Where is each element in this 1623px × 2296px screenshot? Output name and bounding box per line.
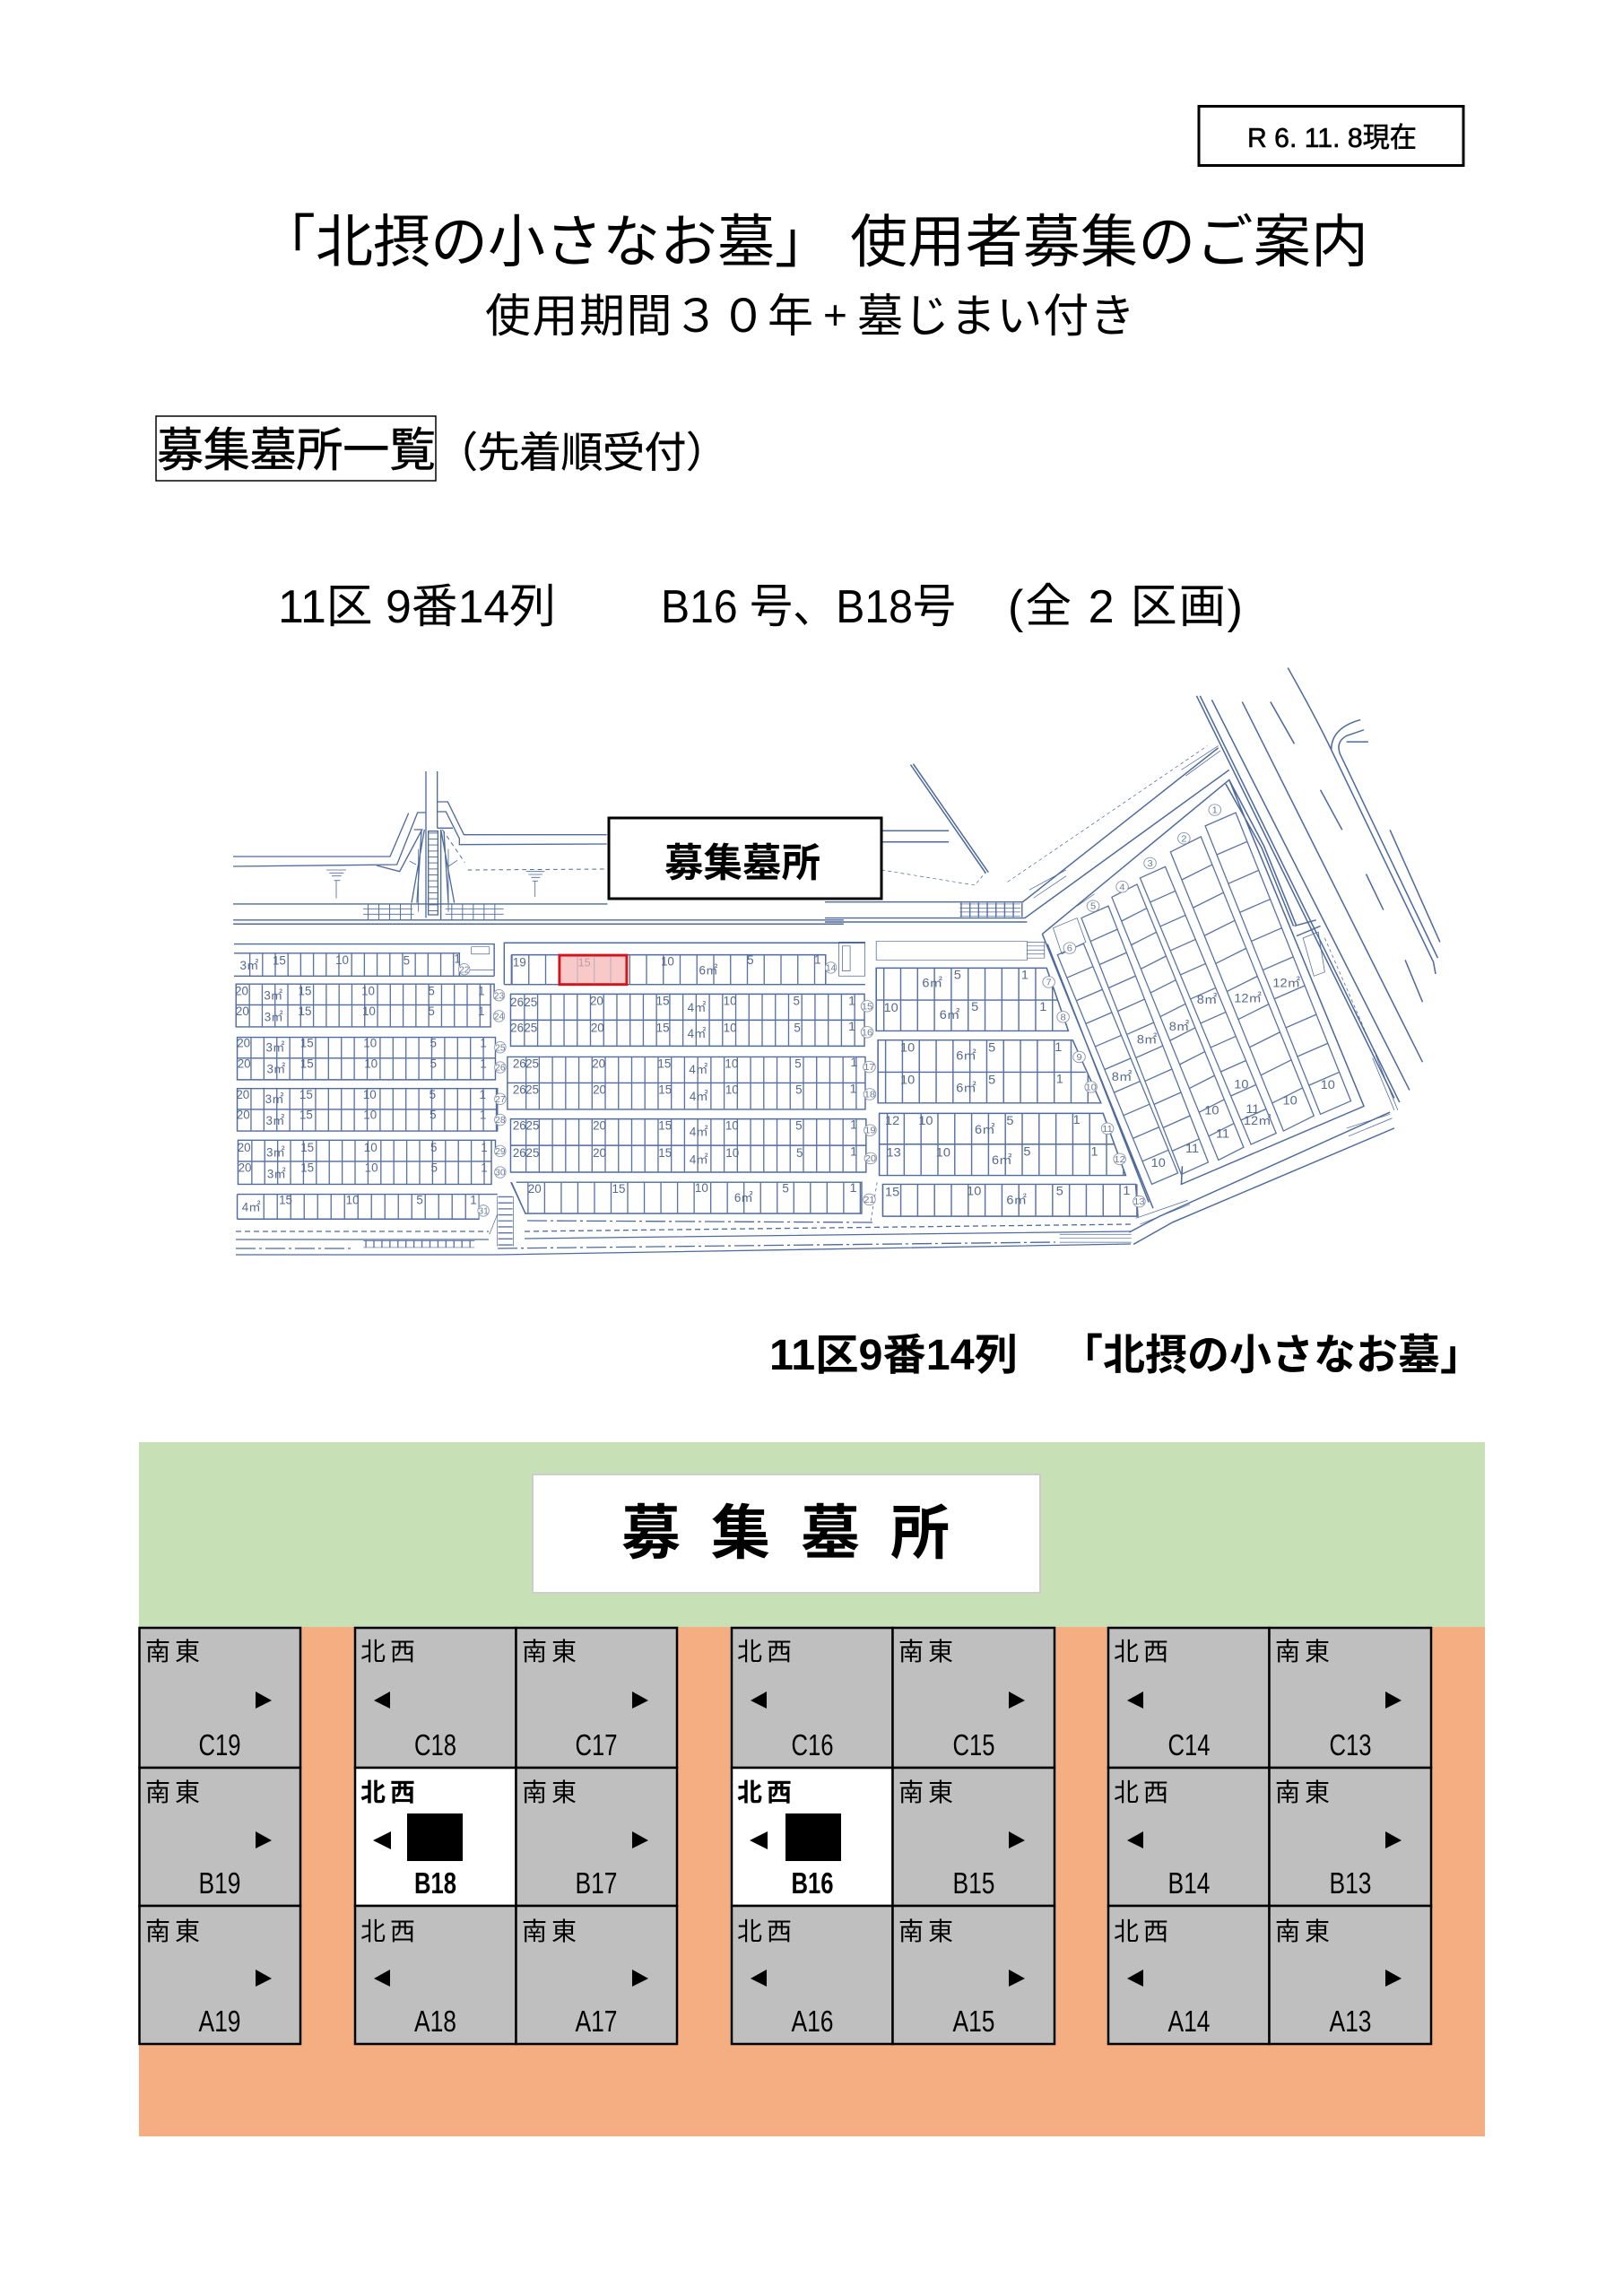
cell C13: [1270, 1628, 1431, 1768]
map: section number circles, right blocks: 11: [1102, 1124, 1113, 1135]
cell A14: [1108, 1906, 1270, 2044]
cell B15: 南東: [898, 1779, 958, 1806]
cell A18: A18: [414, 2005, 456, 2038]
cell C14: 北西: [1114, 1638, 1173, 1665]
cell B16 available: [732, 1768, 893, 1906]
map: section number circles, right blocks: 5: [1090, 901, 1096, 912]
map: section number circles, right blocks: 9: [1076, 1052, 1082, 1063]
map: section number circles, right blocks: 12: [1114, 1154, 1125, 1165]
cemetery map: [233, 668, 1440, 1255]
map: plot numbers, right blocks: 5: [988, 1073, 995, 1086]
map: plot numbers, right blocks: 13: [886, 1145, 901, 1159]
cell A17: 南東: [522, 1918, 581, 1945]
map: section number circles, left blocks: 29: [495, 1147, 506, 1157]
map: plot numbers, right blocks: 11: [1185, 1142, 1199, 1155]
map: plot numbers, right blocks: 10: [1283, 1093, 1298, 1107]
map: plot numbers, right blocks: 10: [900, 1040, 915, 1055]
cell B15: B15: [952, 1866, 995, 1900]
map: plot numbers, left blocks: 3㎡: [265, 1010, 283, 1023]
map: plot numbers, left blocks: 4㎡: [690, 1153, 708, 1167]
map: plot numbers, left blocks: 10: [365, 1161, 378, 1175]
map: plot numbers, right blocks: 6㎡: [922, 976, 942, 989]
map: right plot rows: [876, 968, 1138, 1216]
map: plot numbers, right blocks: 12㎡: [1244, 1113, 1271, 1127]
map: plot numbers, left blocks: 20: [235, 984, 248, 997]
map: plot numbers, left blocks: 15: [658, 1146, 672, 1160]
map: plot numbers, left blocks: 20: [238, 1141, 251, 1154]
date box: [1199, 106, 1463, 165]
plot layout background: green area: [139, 1442, 1485, 1627]
cell A17: [516, 1906, 677, 2044]
map: section number circles, right blocks: 4: [1119, 883, 1125, 892]
map: plot numbers, left blocks: 3㎡: [266, 1146, 285, 1160]
map: plot numbers, left blocks: 1: [478, 1004, 485, 1018]
map: plot numbers, right blocks: 12: [885, 1113, 899, 1127]
map: plot numbers, right blocks: 11: [1216, 1126, 1229, 1140]
map caption: 「北摂の小さなお墓」: [1061, 1331, 1482, 1378]
plot layout background: orange path area: [139, 1627, 1485, 2136]
map: plot numbers, left blocks: 15: [300, 1141, 314, 1154]
map: section number circles, right blocks: 7: [1046, 978, 1052, 987]
cell C14: C14: [1167, 1728, 1211, 1761]
map: section number circles, right blocks: 3: [1147, 858, 1153, 869]
map: plot numbers, left blocks: 25: [524, 996, 537, 1009]
cell A14: 北西: [1114, 1918, 1173, 1945]
map: plot numbers, left blocks: 25: [526, 1146, 539, 1160]
map: plot numbers, left blocks: 1: [454, 952, 461, 966]
cell A18: [355, 1906, 516, 2044]
cell B16 available: B16: [791, 1866, 834, 1900]
map: lower road lines: [236, 1221, 1131, 1255]
heading box: recruitment plots: 募集墓所: [621, 1500, 980, 1566]
map: section number circles, right blocks: 20: [865, 1153, 876, 1164]
map: plot numbers, left blocks: 25: [526, 1119, 539, 1133]
map: plot numbers, left blocks: 3㎡: [265, 1092, 284, 1106]
map: plot numbers, right blocks: 1: [1123, 1184, 1131, 1197]
cell C14: [1108, 1628, 1270, 1768]
map: plot numbers, left blocks: 20: [593, 1146, 606, 1160]
map: plot numbers, left blocks: 1: [481, 1141, 488, 1154]
cell C18: 北西: [360, 1638, 420, 1665]
map: plot numbers, left blocks: 15: [658, 1119, 672, 1133]
map: left and centre plot rows: [233, 904, 866, 1248]
cell C16: 北西: [737, 1638, 796, 1665]
map: plot numbers, right blocks: 1: [850, 1056, 858, 1069]
cell A18: 北西: [360, 1918, 420, 1945]
map: section number circles, right blocks: 15: [862, 1002, 872, 1012]
map: plot numbers, left blocks: 15: [299, 1109, 313, 1122]
map: plot numbers, left blocks: 5: [796, 1146, 803, 1160]
plot summary line: 11区 9番14列: [278, 581, 556, 633]
map: section number circles, right blocks: 21: [864, 1195, 875, 1205]
title: 「北摂の小さなお墓」: [258, 210, 832, 274]
map: plot numbers, right blocks: 1: [850, 1118, 857, 1131]
map: plot numbers, left blocks: 15: [279, 1193, 292, 1206]
map: angled long plot strips: [1057, 813, 1350, 1184]
map: section number circles, right blocks: 6: [1067, 944, 1072, 953]
map: plot numbers, left blocks: 4㎡: [690, 1090, 708, 1103]
map: plot numbers, right blocks: 10: [918, 1113, 933, 1127]
map: section number circles, left blocks: 27: [495, 1095, 506, 1105]
map: plot numbers, left blocks: 25: [525, 1057, 539, 1071]
date box: R 6. 11. 8現在: [1247, 122, 1417, 153]
map: plot numbers, left blocks: 10: [364, 1141, 378, 1154]
map: section number circles, left blocks: [458, 962, 837, 1216]
map: plot numbers, left blocks: 19: [513, 956, 526, 970]
cell C15: [893, 1628, 1055, 1768]
map: plot numbers, left blocks: [235, 952, 821, 1213]
map: plot numbers, right blocks: 6㎡: [992, 1153, 1012, 1167]
map: plot numbers, right blocks: 1: [1039, 1000, 1047, 1013]
map: plot numbers, left blocks: 15: [658, 1083, 672, 1097]
map: plot numbers, left blocks: 15: [657, 1057, 671, 1071]
map: plot numbers, left blocks: 1: [480, 1057, 487, 1071]
map: plot numbers, left blocks: 4㎡: [688, 1027, 707, 1040]
map: plot numbers, left blocks: 10: [661, 955, 674, 969]
map: plot numbers, left blocks: 10: [362, 1004, 376, 1018]
map: plot numbers, left blocks: 1: [481, 1161, 488, 1175]
map: plot numbers, left blocks: 20: [528, 1182, 542, 1196]
map: section number circles, left blocks: 14: [826, 963, 837, 973]
cell C16: [732, 1628, 893, 1768]
cell B16 available: 北西: [737, 1779, 796, 1806]
map: plot numbers, right blocks: 1: [1021, 968, 1028, 981]
map: plot numbers, right blocks: 1: [1055, 1039, 1063, 1054]
cell C18: [355, 1628, 516, 1768]
map: plot numbers, right blocks: 1: [848, 994, 855, 1007]
map: plot numbers, left blocks: 3㎡: [266, 1062, 286, 1075]
map: plot numbers, left blocks: 15: [299, 1088, 313, 1101]
map: plot numbers, left blocks: 10: [363, 1109, 377, 1122]
map: plot numbers, right blocks: 5: [1006, 1113, 1014, 1127]
map: plot numbers, left blocks: 5: [794, 1057, 802, 1071]
cell C13: C13: [1329, 1728, 1372, 1761]
map: plot numbers, left blocks: 5: [428, 984, 435, 997]
cell A19: 南東: [145, 1918, 204, 1945]
map: plot numbers, left blocks: 15: [299, 984, 311, 997]
map: section number circles, right blocks: 8: [1061, 1013, 1066, 1022]
cell A14: A14: [1167, 2005, 1211, 2038]
map: plot numbers, left blocks: 25: [525, 1083, 539, 1097]
map: plot numbers, left blocks: 5: [793, 994, 800, 1007]
map callout: recruitment plots: [609, 818, 881, 899]
subtitle: +: [823, 291, 847, 338]
map: right blocks and angled plots: [825, 668, 1440, 1244]
map: highlighted plots in red: [560, 955, 627, 985]
map: plot numbers, left blocks: 20: [236, 1088, 249, 1101]
cell B18 available: 北西: [360, 1779, 420, 1806]
map: section number circles, right blocks: 18: [864, 1090, 875, 1100]
map: plot numbers, left blocks: 15: [656, 1021, 670, 1034]
map: plot numbers, right blocks: 10: [936, 1145, 950, 1159]
cell A13: A13: [1329, 2005, 1372, 2038]
section heading: list of plots: 募集墓所一覧: [157, 425, 436, 477]
cell C17: C17: [576, 1728, 617, 1761]
map: plot numbers, right blocks: 5: [1056, 1184, 1063, 1197]
section heading: list of plots: [156, 416, 728, 481]
map: section number circles, left blocks: 30: [495, 1169, 506, 1178]
map: plot numbers, left blocks: 26: [510, 1021, 524, 1034]
map: section number circles, right blocks: 1: [1212, 805, 1218, 815]
map: section number circles, left blocks: 26: [495, 1064, 506, 1074]
map: plot numbers, left blocks: 20: [593, 1083, 606, 1097]
map: plot numbers, right blocks: 1: [849, 1180, 857, 1195]
map: plot numbers, left blocks: 15: [612, 1182, 625, 1196]
cell B13: 南東: [1275, 1779, 1334, 1806]
plot summary line: [278, 581, 1243, 633]
cell A16: 北西: [737, 1918, 796, 1945]
cell A13: 南東: [1275, 1918, 1334, 1945]
map: section number circles, left blocks: 28: [495, 1116, 506, 1126]
map: plot numbers, left blocks: 26: [510, 996, 524, 1009]
cell B14: B14: [1167, 1866, 1211, 1900]
map: plot numbers, left blocks: 5: [428, 1004, 435, 1018]
map: plot numbers, right blocks: 10: [1151, 1155, 1166, 1170]
map callout: recruitment plots: 募集墓所: [664, 841, 820, 885]
cell B19: 南東: [145, 1779, 204, 1806]
map: plot numbers, left blocks: 1: [479, 1088, 486, 1101]
map: plot numbers, left blocks: 10: [724, 1021, 737, 1034]
cell A15: A15: [952, 2005, 995, 2038]
map: section number circles, right blocks: 10: [1085, 1083, 1097, 1092]
map: plot numbers, right blocks: 10: [967, 1184, 982, 1197]
map: section number circles, left blocks: 23: [494, 991, 504, 1001]
map: plot numbers, left blocks: 5: [794, 1021, 801, 1034]
map: plot numbers, left blocks: 1: [480, 1037, 487, 1050]
map: plot numbers, left blocks: 5: [430, 1088, 436, 1101]
subtitle: [485, 291, 1135, 342]
cell C15: C15: [952, 1728, 995, 1761]
map: plot numbers, left blocks: 6㎡: [734, 1191, 753, 1205]
cell A13: [1270, 1906, 1431, 2044]
plot grid: [140, 1628, 1431, 2044]
map: plot numbers, right blocks: 1: [848, 1020, 855, 1033]
map: plot numbers, right blocks: 11: [1245, 1101, 1260, 1116]
map: plot numbers, right blocks: 6㎡: [1006, 1193, 1027, 1206]
map: plot numbers, left blocks: 5: [795, 1083, 803, 1097]
map: plot numbers, left blocks: 15: [300, 1057, 314, 1071]
map: plot numbers, right blocks: [848, 968, 1335, 1206]
map: plot numbers, left blocks: 10: [725, 1083, 739, 1097]
map: plot numbers, left blocks: 26: [513, 1119, 526, 1133]
map: plot numbers, right blocks: 5: [971, 1000, 978, 1013]
cell B18 available: B18: [414, 1866, 456, 1900]
map: plot numbers, left blocks: 3㎡: [264, 989, 283, 1003]
cell C16: C16: [791, 1728, 834, 1761]
map: plot numbers, left blocks: 5: [430, 1037, 437, 1050]
map: plot numbers, left blocks: 20: [238, 1057, 251, 1071]
map: plot numbers, right blocks: 5: [1023, 1144, 1031, 1159]
map: plot numbers, right blocks: 8㎡: [1197, 993, 1217, 1006]
map: plot numbers, left blocks: 3㎡: [266, 1041, 285, 1055]
map: section number circles, left blocks: 25: [495, 1043, 506, 1053]
cell A19: [140, 1906, 300, 2044]
plot summary line: B16 号、B18号: [661, 581, 956, 633]
cell A16: A16: [791, 2005, 834, 2038]
map: plot numbers, left blocks: 20: [237, 1037, 250, 1050]
map: plot numbers, right blocks: 8㎡: [1112, 1070, 1132, 1083]
map: plot numbers, left blocks: 5: [782, 1181, 789, 1195]
cell B17: [516, 1768, 677, 1906]
map: section number circles, left blocks: 24: [494, 1012, 504, 1022]
map: plot numbers, left blocks: 15: [273, 953, 286, 967]
map: highlighted plots in red: 15: [578, 957, 591, 970]
map: plot numbers, right blocks: 15: [885, 1185, 899, 1198]
cell C19: 南東: [145, 1638, 204, 1665]
map: plot numbers, left blocks: 26: [513, 1057, 526, 1071]
map: plot numbers, left blocks: 26: [513, 1083, 526, 1097]
plot summary line: (全 2 区画): [1008, 581, 1243, 633]
map: stairway and upper walls: [233, 771, 607, 919]
cell A15: [893, 1906, 1055, 2044]
cell C19: C19: [199, 1728, 240, 1761]
map: plot numbers, left blocks: 20: [593, 1119, 606, 1133]
map: plot numbers, left blocks: 25: [524, 1021, 537, 1034]
map: plot numbers, right blocks: 6㎡: [940, 1008, 959, 1022]
map: plot numbers, left blocks: 1: [478, 984, 485, 997]
map: plot numbers, right blocks: 10: [1234, 1077, 1249, 1091]
map: plot numbers, right blocks: 12㎡: [1272, 976, 1300, 989]
cell A19: A19: [199, 2005, 240, 2038]
map: plot numbers, left blocks: 5: [430, 1161, 438, 1175]
map: plot numbers, left blocks: 26: [513, 1146, 526, 1160]
map: plot numbers, left blocks: 4㎡: [242, 1200, 261, 1213]
map: plot numbers, right blocks: 1: [1073, 1113, 1081, 1126]
map: plot numbers, right blocks: 10: [884, 1001, 898, 1014]
map: plot numbers, right blocks: 1: [850, 1144, 857, 1159]
cell A17: A17: [576, 2005, 617, 2038]
map: plot numbers, right blocks: 8㎡: [1169, 1020, 1189, 1033]
map: plot numbers, left blocks: 3㎡: [267, 1167, 286, 1180]
cell B17: 南東: [522, 1779, 581, 1806]
map: plot numbers, left blocks: 15: [300, 1161, 314, 1175]
map: plot numbers, left blocks: 4㎡: [688, 1001, 707, 1014]
map: plot numbers, left blocks: 5: [430, 1109, 437, 1122]
cell C13: 南東: [1275, 1638, 1334, 1665]
map caption: 11区9番14列: [769, 1332, 1018, 1379]
map: section number circles, left blocks: 22: [459, 965, 470, 975]
map: section number circles, right blocks: [861, 804, 1221, 1207]
map: plot numbers, right blocks: 1: [1056, 1072, 1063, 1085]
cell A16: [732, 1906, 893, 2044]
map: section number circles, right blocks: 17: [864, 1063, 875, 1073]
map: plot numbers, right blocks: 8㎡: [1137, 1032, 1157, 1047]
map: plot numbers, left blocks: 20: [239, 1161, 251, 1175]
map: plot numbers, left blocks: 5: [747, 953, 754, 967]
map: plot numbers, left blocks: 5: [795, 1119, 803, 1133]
cell C17: 南東: [522, 1638, 581, 1665]
cell A15: 南東: [898, 1918, 958, 1945]
map caption: [769, 1331, 1482, 1379]
map: plot numbers, left blocks: 20: [237, 1109, 250, 1122]
subtitle: 墓じまい付き: [857, 291, 1135, 342]
cell B14: [1108, 1768, 1270, 1906]
map: plot numbers, right blocks: 12㎡: [1234, 991, 1262, 1005]
map: plot numbers, left blocks: 10: [725, 1057, 738, 1071]
cell B17: B17: [576, 1866, 617, 1900]
map: plot numbers, left blocks: 10: [695, 1181, 708, 1195]
title: 使用者募集のご案内: [850, 210, 1368, 274]
map: plot numbers, right blocks: 6㎡: [956, 1048, 976, 1062]
map: plot numbers, right blocks: 5: [954, 968, 961, 981]
map: section number circles, right blocks: 2: [1181, 834, 1187, 844]
cell B14: 北西: [1114, 1779, 1173, 1806]
map: plot numbers, left blocks: 1: [814, 952, 821, 966]
map: section number circles, right blocks: 16: [862, 1028, 872, 1038]
cell C15: 南東: [898, 1638, 958, 1665]
title: [258, 210, 1368, 274]
map: plot numbers, left blocks: 20: [591, 1021, 604, 1034]
cell B13: B13: [1329, 1866, 1372, 1900]
map: plot numbers, left blocks: 1: [480, 1109, 486, 1122]
map: plot numbers, left blocks: 5: [430, 1057, 437, 1071]
cell C17: [516, 1628, 677, 1768]
map: plot numbers, left blocks: 3㎡: [266, 1114, 285, 1127]
map: plot numbers, left blocks: 4㎡: [690, 1125, 708, 1138]
map: plot numbers, left blocks: 4㎡: [689, 1063, 708, 1076]
map: plot numbers, left blocks: 10: [335, 953, 349, 967]
map: plot numbers, right blocks: 10: [900, 1073, 915, 1086]
cell C18: C18: [414, 1728, 456, 1761]
map: plot numbers, left blocks: 10: [361, 984, 375, 997]
map: plot numbers, left blocks: 5: [416, 1193, 423, 1206]
map: plot numbers, right blocks: 10: [1204, 1103, 1219, 1118]
map: plot numbers, right blocks: 6㎡: [956, 1081, 976, 1094]
section heading: list of plots: （先着順受付）: [436, 429, 728, 476]
map: section number circles, right blocks: 13: [1133, 1197, 1145, 1207]
cell C19: [140, 1628, 300, 1768]
map: plot numbers, left blocks: 10: [346, 1193, 360, 1206]
map: plot numbers, left blocks: 6㎡: [699, 963, 718, 977]
map: plot numbers, left blocks: 10: [363, 1037, 377, 1050]
map: plot numbers, left blocks: 1: [470, 1193, 477, 1206]
map: plot numbers, right blocks: 5: [988, 1040, 995, 1055]
map: plot numbers, left blocks: 5: [430, 1141, 437, 1154]
cell B13: [1270, 1768, 1431, 1906]
map: plot numbers, left blocks: 10: [724, 994, 737, 1007]
map: plot numbers, left blocks: 15: [300, 1037, 314, 1050]
map: plot numbers, left blocks: 10: [363, 1088, 377, 1101]
map: plot numbers, right blocks: 1: [849, 1082, 857, 1096]
map: plot numbers, right blocks: 1: [1090, 1144, 1098, 1159]
cell B18 available: [355, 1768, 516, 1906]
heading box: recruitment plots: [533, 1474, 1040, 1593]
cell B15: [893, 1768, 1055, 1906]
map: plot numbers, right blocks: 6㎡: [975, 1123, 995, 1136]
map: section number circles, right blocks: 19: [864, 1126, 876, 1136]
map: plot numbers, left blocks: 15: [656, 994, 670, 1007]
map: plot numbers, left blocks: 15: [299, 1004, 311, 1018]
subtitle: 使用期間３０年: [485, 291, 813, 342]
map: plot numbers, left blocks: 20: [236, 1004, 249, 1018]
map: plot numbers, left blocks: 3㎡: [240, 959, 259, 972]
map: plot numbers, right blocks: 10: [1321, 1078, 1335, 1091]
map: plot numbers, left blocks: 10: [725, 1119, 739, 1133]
map: plot numbers, left blocks: 5: [404, 953, 410, 967]
map: plot numbers, left blocks: 20: [590, 994, 603, 1007]
map: section number circles, left blocks: 31: [478, 1206, 489, 1216]
map: plot numbers, left blocks: 10: [725, 1146, 739, 1160]
cell B19: B19: [199, 1866, 240, 1900]
cell B19: [140, 1768, 300, 1906]
map: plot numbers, left blocks: 10: [364, 1057, 378, 1071]
map: plot numbers, left blocks: 20: [592, 1057, 605, 1071]
